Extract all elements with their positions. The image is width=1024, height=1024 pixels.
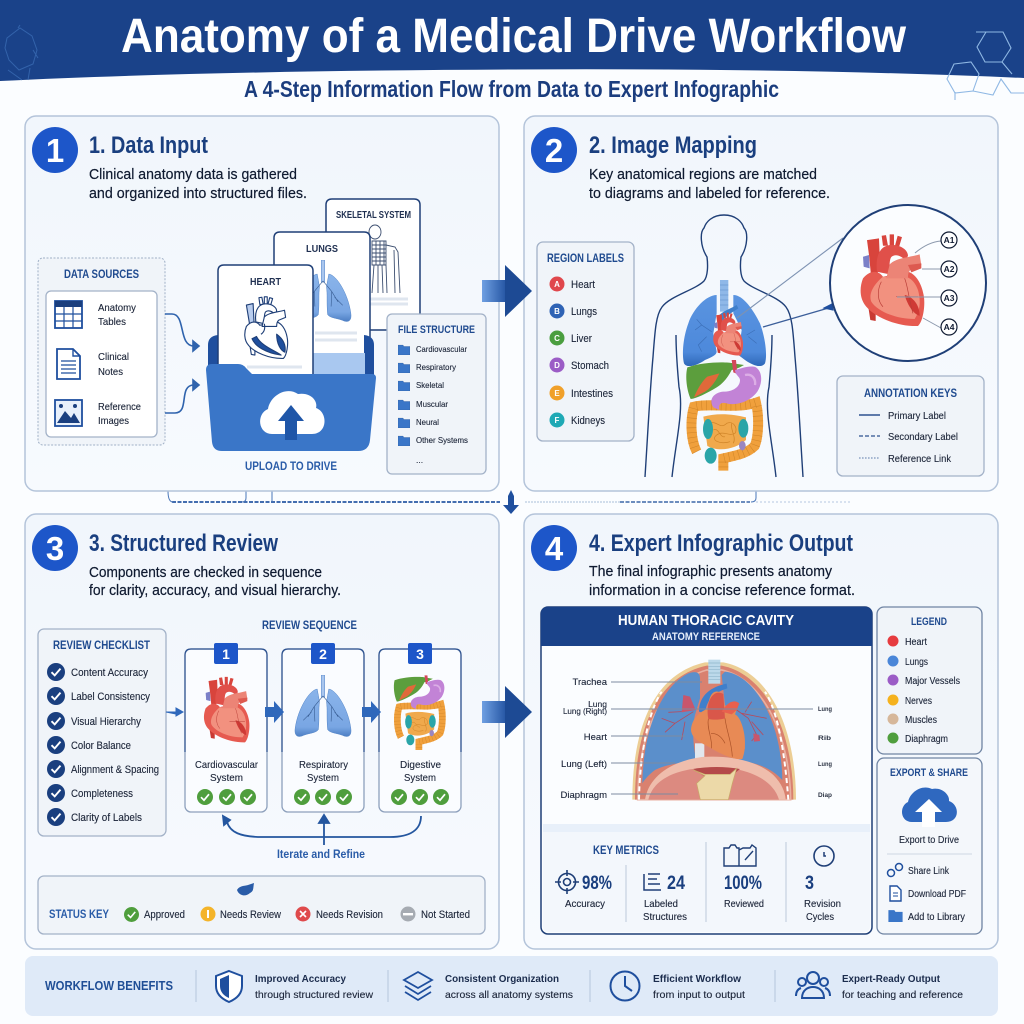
data sources box: Reference (98, 401, 141, 413)
step number 2: 2 (545, 132, 563, 169)
review card: respiratory: System (307, 772, 339, 784)
heading: 1. Data Input (89, 132, 208, 159)
panel 4: expert infographic output (524, 514, 998, 949)
reference sheet (541, 607, 872, 934)
export and share (877, 758, 982, 934)
step number 3: 3 (46, 530, 64, 567)
left labels: Trachea (572, 677, 608, 688)
icon: table (55, 301, 82, 328)
sheet header: ANATOMY REFERENCE (652, 631, 760, 643)
data sources box: Notes (98, 366, 123, 378)
description (89, 166, 307, 202)
file structure: ... (416, 455, 423, 465)
zoomed heart circle: A2 (944, 264, 955, 274)
review checklist: Color Balance (71, 740, 131, 752)
iterate loop arrows (223, 815, 421, 845)
file structure: FILE STRUCTURE (398, 324, 475, 336)
annotation keys: Secondary Label (888, 431, 958, 443)
file structure: Skeletal (416, 380, 444, 390)
region labels: Liver (571, 333, 592, 345)
icon: skeleton (369, 225, 400, 293)
left labels: Lung (Left) (561, 759, 607, 770)
description: Components are checked in sequence (89, 564, 322, 581)
status key: Approved (144, 909, 185, 921)
legend: Nerves (905, 696, 932, 707)
zoomed heart circle (830, 205, 986, 361)
benefit: organization: across all anatomy systems (445, 989, 573, 1001)
arrow: panel 1 to 2 (482, 265, 532, 317)
thorax illustration (632, 660, 796, 800)
arrow: checklist to sequence (166, 708, 183, 716)
region labels: Stomach (571, 360, 609, 372)
benefit: accuracy: Improved Accuracy (255, 973, 346, 985)
description: for clarity, accuracy, and visual hierarchy. (89, 582, 341, 599)
icon: upload cloud (260, 391, 325, 440)
region labels: E (554, 389, 560, 398)
zoomed heart circle: A4 (944, 322, 955, 332)
description (589, 563, 855, 599)
step number 2 (531, 127, 577, 173)
file structure: Neural (416, 417, 439, 427)
right labels: Lung (818, 762, 832, 768)
step number 4: 4 (545, 530, 564, 567)
metric: accuracy: Accuracy (565, 898, 606, 910)
arrow: card 1 to 2 (265, 701, 284, 723)
metric: structures: Labeled (644, 898, 678, 910)
right labels (818, 707, 832, 799)
left labels (561, 677, 608, 801)
organ: lungs (683, 280, 766, 366)
export and share: Share Link (908, 866, 950, 877)
annotation keys: Reference Link (888, 453, 952, 465)
icon: link (888, 864, 902, 876)
benefit: output: Expert-Ready Output (842, 973, 940, 985)
status key: Needs Revision (316, 909, 383, 921)
metric: revisions: 3 (805, 873, 814, 894)
region labels: REGION LABELS (547, 253, 624, 265)
arrows: sources to folder (165, 314, 199, 413)
file structure: Cardiovascular (416, 344, 467, 354)
export and share: Add to Library (908, 912, 965, 923)
upload label: UPLOAD TO DRIVE (245, 459, 337, 473)
data sources box: Anatomy (98, 302, 137, 314)
status key: Needs Review (220, 909, 281, 921)
iterate label: Iterate and Refine (277, 847, 365, 861)
legend: LEGEND (911, 616, 947, 628)
header molecule right (947, 32, 1024, 100)
benefit: workflow (610, 972, 745, 1001)
review card: cardiovascular: Cardiovascular (195, 759, 258, 771)
sheet header (541, 607, 872, 646)
legend: Diaphragm (905, 734, 948, 745)
review card: respiratory (282, 643, 364, 812)
data sources box: Images (98, 415, 129, 427)
legend: Major Vessels (905, 676, 960, 687)
benefits banner (25, 956, 998, 1016)
metric: reviewed: 100% (724, 873, 762, 894)
review card: digestive: 3 (416, 646, 424, 662)
right labels: Lung (818, 707, 832, 713)
legend: Lungs (905, 657, 928, 668)
step number 4 (531, 525, 577, 571)
card: heart: HEART (250, 276, 281, 288)
folder back tabs (208, 335, 374, 377)
review checklist: Clarity of Labels (71, 812, 143, 824)
card: lungs: LUNGS (306, 243, 338, 255)
icon: status glyph (237, 883, 254, 895)
review sequence label: REVIEW SEQUENCE (262, 620, 357, 632)
data sources box: Tables (98, 316, 126, 328)
subtitle: A 4-Step Information Flow from Data to Expert Infographic (244, 76, 779, 102)
review card: cardiovascular (185, 643, 267, 812)
callout lines (737, 238, 843, 327)
region labels: C (554, 334, 560, 343)
review card: respiratory: 2 (319, 646, 327, 662)
panel 2: image mapping (524, 116, 998, 491)
card: skeletal system: SKELETAL SYSTEM (336, 210, 411, 221)
metric: structures: Structures (643, 911, 687, 923)
icon: image (55, 400, 82, 426)
annotation keys: Primary Label (888, 410, 946, 422)
flow connector between rows (168, 490, 850, 514)
review card: cardiovascular: System (210, 772, 243, 784)
file structure: Muscular (416, 399, 448, 409)
icon: lungs (295, 260, 351, 321)
left labels: Lung (588, 699, 607, 709)
arrow: card 2 to 3 (362, 701, 381, 723)
zoomed heart circle: A3 (944, 293, 955, 303)
benefit: output (796, 972, 963, 1001)
benefit: accuracy: through structured review (255, 989, 373, 1001)
organ: digestive (686, 360, 761, 471)
benefit: accuracy (216, 971, 373, 1002)
review card: digestive (379, 643, 461, 812)
region labels: B (554, 307, 560, 316)
icon: pdf (890, 886, 901, 901)
review checklist (38, 629, 166, 836)
card: skeletal system (326, 199, 420, 330)
file structure: Other Systems (416, 435, 468, 445)
region labels: F (555, 416, 560, 425)
leader lines (611, 682, 813, 794)
export and share: Export to Drive (899, 834, 959, 846)
step number 1 (32, 127, 78, 173)
description (89, 564, 341, 599)
header molecule left (5, 25, 38, 80)
body outline (645, 215, 803, 477)
review checklist: Visual Hierarchy (71, 716, 142, 728)
export and share: EXPORT & SHARE (890, 767, 968, 779)
description: Clinical anatomy data is gathered (89, 166, 297, 183)
step number 3 (32, 525, 78, 571)
status key: Not Started (421, 909, 470, 921)
annotation keys (837, 376, 984, 476)
region labels: Heart (571, 279, 595, 291)
benefit: organization (404, 972, 573, 1001)
metric: revisions: Revision (804, 898, 841, 910)
metric: structures (643, 873, 687, 923)
region labels: Lungs (571, 306, 597, 318)
description (589, 166, 830, 202)
legend (877, 607, 982, 754)
review card: cardiovascular: 1 (222, 646, 230, 662)
description: and organized into structured files. (89, 185, 307, 202)
metric: revisions (804, 846, 841, 923)
data sources box: DATA SOURCES (64, 269, 139, 281)
zoomed heart circle: A1 (944, 235, 955, 245)
icon: export cloud (902, 787, 957, 827)
region labels: Intestines (571, 388, 613, 400)
region labels (537, 242, 634, 441)
panel 3: structured review (25, 514, 499, 949)
icon: clinical note (57, 349, 80, 379)
annotation keys: ANNOTATION KEYS (864, 388, 957, 400)
card: heart (218, 265, 313, 385)
metric: accuracy (555, 870, 612, 910)
folder front (206, 364, 376, 451)
data sources box: Clinical (98, 351, 129, 363)
benefit: workflow: from input to output (653, 989, 745, 1001)
right labels: Diap (818, 793, 832, 799)
organ: heart (713, 313, 743, 356)
review card: digestive: Digestive (400, 759, 441, 771)
description: to diagrams and labeled for reference. (589, 185, 830, 202)
review card: respiratory: Respiratory (299, 759, 349, 771)
data sources box (38, 258, 165, 445)
description: The final infographic presents anatomy (589, 563, 832, 580)
review checklist: Alignment & Spacing (71, 764, 159, 776)
header banner (0, 0, 1024, 100)
benefit: organization: Consistent Organization (445, 973, 559, 985)
review checklist: Completeness (71, 788, 134, 800)
description: information in a concise reference format. (589, 582, 855, 599)
step number 1: 1 (46, 132, 64, 169)
left labels: Lung (Right) (563, 707, 607, 716)
left labels: Heart (584, 732, 607, 743)
file structure: Respiratory (416, 362, 457, 372)
sheet header: HUMAN THORACIC CAVITY (618, 612, 794, 629)
legend: Heart (905, 637, 927, 648)
review checklist: REVIEW CHECKLIST (53, 640, 150, 652)
region labels: Kidneys (571, 415, 605, 427)
card: lungs (274, 232, 370, 360)
metric: reviewed (724, 845, 764, 910)
key metrics: KEY METRICS (593, 843, 659, 857)
benefit: workflow: Efficient Workflow (653, 973, 742, 985)
description: Key anatomical regions are matched (589, 166, 817, 183)
key metrics (543, 824, 870, 932)
arrow: panel 3 to 4 (482, 686, 532, 738)
review card: digestive: System (404, 772, 436, 784)
icon: heart line art (245, 297, 288, 358)
region labels: A (554, 280, 560, 289)
heading: 4. Expert Infographic Output (589, 530, 853, 557)
export and share: Download PDF (908, 889, 966, 900)
metric: accuracy: 98% (582, 873, 612, 894)
title: Anatomy of a Medical Drive Workflow (121, 10, 907, 63)
benefit: output: for teaching and reference (842, 989, 963, 1001)
heading: 3. Structured Review (89, 530, 278, 557)
file structure (387, 314, 486, 474)
status key: STATUS KEY (49, 909, 109, 921)
metric: reviewed: Reviewed (724, 898, 764, 910)
panel 1: data input (25, 116, 499, 491)
metric: structures: 24 (667, 873, 685, 894)
body diagram (645, 215, 803, 477)
icon: library folder (888, 910, 903, 922)
status key (38, 876, 485, 934)
region labels: D (554, 361, 560, 370)
review checklist: Label Consistency (71, 691, 151, 703)
left labels: Diaphragm (561, 790, 607, 801)
legend: Muscles (905, 715, 937, 726)
review checklist: Content Accuracy (71, 667, 149, 679)
metric: revisions: Cycles (806, 911, 834, 923)
right labels: Rib (818, 736, 831, 742)
heading: 2. Image Mapping (589, 132, 757, 159)
benefits banner: WORKFLOW BENEFITS (45, 979, 173, 993)
